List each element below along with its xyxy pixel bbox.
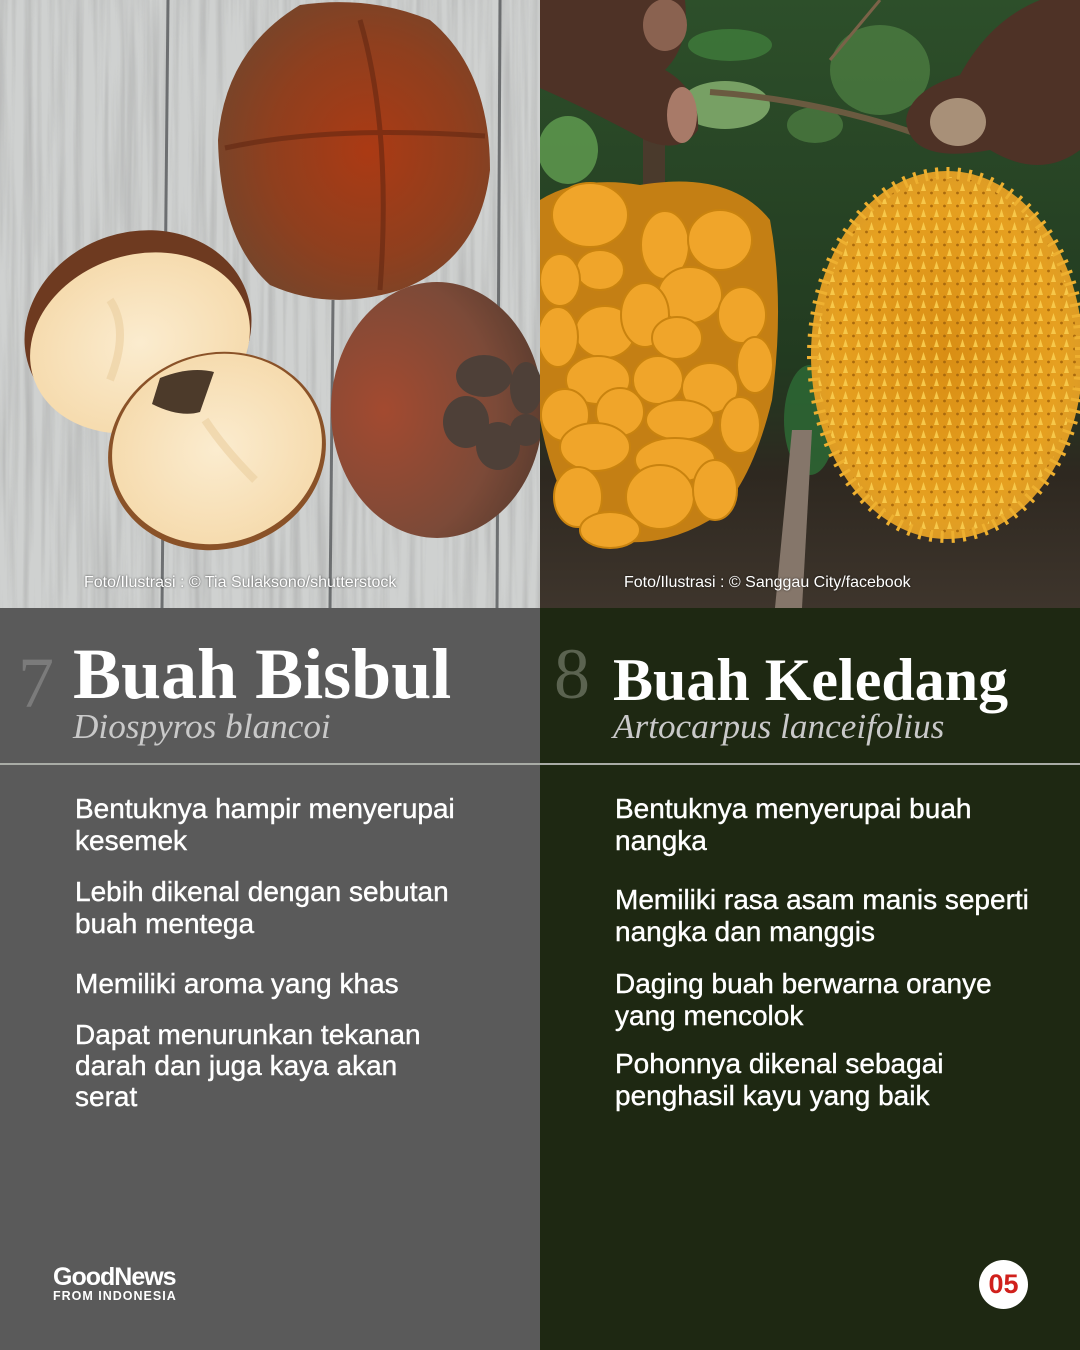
fact: daging: yang mencolok <box>615 1000 803 1030</box>
fact: daging: Daging buah berwarna oranye <box>615 968 992 999</box>
number 7: 7 <box>18 643 54 723</box>
fact: rasa: Memiliki rasa asam manis seperti <box>615 884 1029 915</box>
fact: bentuk <box>75 793 455 856</box>
page number badge: 05 <box>988 1269 1019 1299</box>
photo credit: keledang: Foto/Ilustrasi : © Sanggau City/facebook <box>624 574 911 591</box>
heading: Buah Bisbul: Buah Bisbul <box>73 634 451 714</box>
fact: manfaat: darah dan juga kaya akan <box>75 1050 397 1081</box>
fact: bentuk: Bentuknya menyerupai buah <box>615 793 971 824</box>
fact: kayu: penghasil kayu yang baik <box>615 1080 929 1110</box>
fact: sebutan: buah mentega <box>75 908 254 938</box>
fact: manfaat <box>75 1019 421 1112</box>
logo: GoodNews from Indonesia: FROM INDONESIA <box>53 1289 177 1303</box>
foliage <box>538 25 930 475</box>
fact: manfaat: Dapat menurunkan tekanan <box>75 1019 421 1050</box>
fact: manfaat: serat <box>75 1081 137 1112</box>
fact: bentuk: nangka <box>615 824 707 856</box>
fact: bentuk: kesemek <box>75 824 187 856</box>
fact: rasa <box>615 884 1029 948</box>
fact: kayu <box>615 1048 943 1112</box>
fact: rasa: nangka dan manggis <box>615 916 875 946</box>
scientific name: Artocarpus lanceifolius: Artocarpus lanceifolius <box>613 707 944 746</box>
spiky yellow fruit <box>811 171 1080 539</box>
fact: bentuk <box>615 793 971 856</box>
divider line <box>0 763 1080 765</box>
panel: Buah Bisbul <box>0 608 540 1350</box>
logo: GoodNews from Indonesia: GoodNews <box>53 1263 176 1291</box>
hands <box>540 0 1080 165</box>
fact: bentuk: Bentuknya hampir menyerupai <box>75 793 455 824</box>
number 8: 8 <box>554 634 590 714</box>
photo credit: bisbul: Foto/Ilustrasi : © Tia Sulaksono/shutterstock <box>84 574 396 591</box>
cut fruit right half <box>82 324 352 578</box>
fact: kayu: Pohonnya dikenal sebagai <box>615 1048 943 1079</box>
fact: daging <box>614 968 992 1032</box>
fact: sebutan: Lebih dikenal dengan sebutan <box>75 876 449 907</box>
top fruit <box>218 2 490 300</box>
fact: sebutan <box>75 876 449 940</box>
cut fruit left half <box>0 201 278 461</box>
heading: Buah Keledang: Buah Keledang <box>613 647 1008 713</box>
fact: aroma: Memiliki aroma yang khas <box>75 968 399 999</box>
page number badge <box>979 1260 1028 1309</box>
right fruit <box>331 282 543 538</box>
orange segmented fruit <box>538 70 778 548</box>
photo: bisbul fruits on wooden table <box>0 0 540 608</box>
panel: Buah Keledang <box>540 608 1080 1350</box>
logo: GoodNews from Indonesia <box>53 1263 177 1303</box>
photo: keledang fruits on tree <box>540 0 1080 1305</box>
scientific name: Diospyros blancoi: Diospyros blancoi <box>73 707 331 746</box>
